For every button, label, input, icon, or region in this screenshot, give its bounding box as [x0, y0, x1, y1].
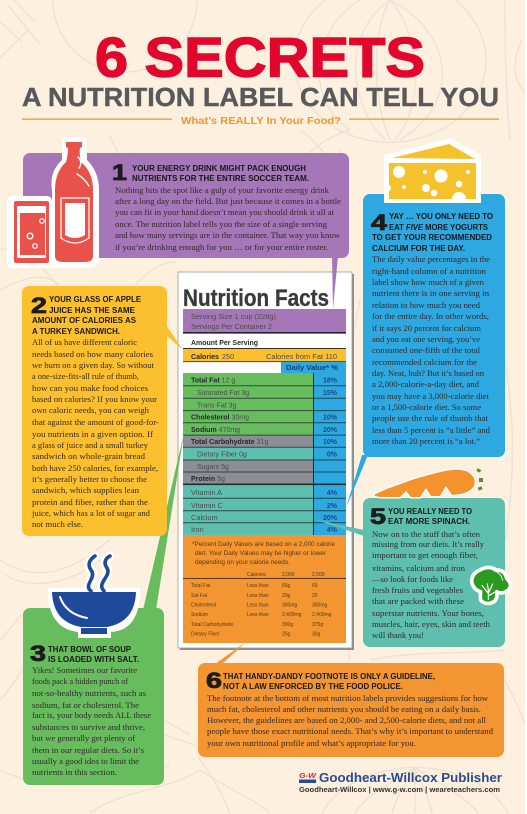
serving info band	[183, 309, 346, 334]
footnote section: Cholesterol	[191, 602, 216, 608]
panel 3: soup	[23, 608, 164, 785]
panel 2 heading: YOUR GLASS OF APPLE	[49, 295, 142, 304]
panel 3 body: nutrients in this section.	[32, 768, 117, 777]
footnote section: Sodium	[191, 612, 208, 618]
footnote section: 65g	[282, 583, 291, 589]
nutrient rows	[183, 373, 346, 535]
panel 3 body: sodium, fat or cholesterol. The	[32, 701, 139, 710]
panel 2 body: protein and fiber, rather than the	[32, 498, 148, 507]
icon: bottle and glass	[7, 137, 99, 268]
panel 3 body: but we generally get plenty of	[32, 734, 135, 743]
footnote section: 60	[312, 583, 318, 589]
panel 1: energy drink	[23, 153, 349, 258]
nutrient rows: Trans Fat 3g	[197, 402, 237, 410]
panel 4 body: less than 5 percent is “a little” and	[372, 426, 491, 435]
number 1: 1	[112, 160, 127, 185]
footnote section: 300mg	[312, 602, 328, 608]
panel 4 body: people use the rule of thumb that	[372, 414, 489, 423]
panel 5: spinach	[363, 498, 505, 647]
number 3: 3	[30, 641, 46, 666]
footnote section: 2,400mg	[282, 612, 302, 618]
panel 4 body: The daily value percentages in the	[372, 255, 490, 264]
nutrient rows: Total Carbohydrate 31g	[191, 439, 268, 446]
nutrient rows: Sugars 5g	[197, 464, 229, 471]
panel 3 heading: IS LOADED WITH SALT.	[48, 655, 139, 664]
title	[22, 26, 499, 127]
icon: soup bowl	[48, 556, 140, 638]
panel 5 body: fresh fruits and vegetables	[372, 586, 463, 595]
calories band	[183, 348, 346, 362]
publisher name: Goodheart-Willcox Publisher	[319, 770, 502, 785]
nutrient rows: 18%	[323, 378, 338, 384]
icon: broccoli	[472, 567, 510, 603]
panel 4 heading: CALCIUM FOR THE DAY.	[372, 244, 465, 253]
label title: Nutrition Facts	[183, 285, 329, 312]
daily value header	[281, 362, 346, 373]
panel 6 body: However, the guidelines are based on 2,000- and 2,500-calorie diets, and not all	[207, 716, 487, 725]
panel 4 heading: EAT FIVE MORE YOGURTS	[389, 223, 489, 232]
nutrient rows: Protein 5g	[191, 476, 225, 483]
footnote section: diet. Your Daily Values may be higher or lower	[195, 550, 326, 557]
panel 5 body	[371, 530, 491, 640]
panel 4 body: if it says 20 percent for calcium	[372, 324, 481, 333]
panel 4 heading	[372, 212, 493, 253]
panel 2 body: not much else.	[32, 520, 83, 529]
subheading: A NUTRITION LABEL CAN TELL YOU	[22, 82, 499, 112]
nutrient rows: 0%	[327, 452, 338, 458]
panel 1 body: after a long day on the field. But just because it comes in a bottle	[115, 197, 341, 206]
footnote section: *Percent Daily Values are based on a 2,000 calorie	[192, 541, 336, 548]
tagline: What’s REALLY In Your Food?	[181, 116, 341, 127]
number 2: 2	[31, 293, 47, 318]
nutrient rows: Total Fat 12 g	[191, 378, 235, 384]
panel 5 body: vitamins, calcium and iron	[372, 564, 466, 573]
panel 4: calcium	[363, 194, 505, 457]
panel 2 body: how can you make food choices	[32, 384, 148, 393]
nutrient rows: 4%	[327, 490, 338, 497]
nutrient rows: 20%	[323, 515, 338, 522]
nutrient rows: Vitamin C	[191, 501, 224, 510]
pointer: purple callout to label	[332, 256, 338, 309]
panel 2 body: a one-size-fits-all rule of thumb,	[32, 372, 139, 381]
panel 3 heading	[48, 645, 139, 664]
panel 5 body: missing from our diets. It’s really	[372, 540, 485, 549]
panel 3 body: not-so-healthy nutrients, such as	[32, 689, 146, 698]
pointer: green callout to label	[143, 433, 184, 610]
panel 1 body: you can fit in your hand doesn’t mean you should drink it all at	[115, 208, 335, 217]
publisher links: Goodheart-Willcox | www.g-w.com | weareteachers.com	[299, 787, 500, 794]
panel 6: footnote	[198, 663, 504, 757]
panel 6 body: people have those exact nutritional needs. That’s why it’s important to understand	[207, 727, 494, 736]
panel 2 heading: A TURKEY SANDWICH.	[32, 327, 120, 336]
footnote section	[183, 535, 346, 643]
footnote section: Calories:	[247, 572, 267, 578]
pointer: blue callout to label	[346, 455, 368, 508]
panel 2 body: it’s generally better to choose the	[32, 475, 147, 484]
panel 1 body: and how many servings are in the container. That way you know	[115, 231, 341, 240]
panel 6 body: your own nutritional profile and what’s appropriate for you.	[207, 739, 416, 748]
panel 5 body: Now on to the stuff that’s often	[372, 530, 481, 539]
panel 3 heading: THAT BOWL OF SOUP	[48, 645, 132, 654]
nutrition facts label	[178, 272, 354, 650]
serving info band: Serving Size 1 cup (228g)	[191, 314, 276, 321]
panel 4 body	[372, 255, 491, 446]
footnote section: depending on your calorie needs.	[195, 559, 290, 566]
heading: 6 secrets: 6 SECRETS	[95, 26, 425, 88]
panel 4 body: right-hand column of a nutrition	[372, 267, 487, 276]
panel 2 body: a glass of juice and a small turkey	[32, 441, 149, 450]
publisher logo	[299, 770, 502, 794]
panel 2: apple juice	[22, 286, 167, 536]
panel 1 heading: YOUR ENERGY DRINK MIGHT PACK ENOUGH	[132, 164, 306, 173]
footnote section: Less than	[247, 593, 269, 599]
panel 3 body: Yikes! Sometimes our favorite	[32, 666, 137, 675]
panel 1 body: if you’re drinking enough for you … or for your entire roster.	[115, 243, 328, 252]
footnote section: 25	[312, 593, 318, 599]
panel 5 heading: YOU REALLY NEED TO	[388, 507, 472, 516]
panel 2 body: needs based on how many calories	[32, 350, 153, 359]
panel 4 body: relation to how much you need	[372, 301, 481, 310]
panel 2 body: that against the amount of good-for-	[32, 418, 159, 427]
panel 3 body: substances to survive and thrive,	[32, 723, 145, 732]
panel 4 heading: YAY … YOU ONLY NEED TO	[389, 212, 493, 221]
panel 2 body: sandwich, which supplies lean	[32, 486, 140, 495]
nutrient rows: 15%	[323, 390, 338, 397]
panel 4 heading: TO GET YOUR RECOMMENDED	[372, 233, 492, 242]
nutrient rows: Vitamin A	[191, 488, 222, 497]
panel 1 body: Nothing hits the spot like a gulp of your favorite energy drink	[115, 186, 330, 195]
panel 2 body: juice, which has a lot of sugar and	[31, 509, 151, 518]
nutrient rows: Iron	[191, 525, 204, 534]
calories band: Calories from Fat 110	[266, 354, 337, 361]
panel 5 body: superstar nutrients. Your bones,	[372, 609, 484, 618]
panel 5 body: that are packed with these	[372, 597, 464, 606]
calories band: 250	[222, 354, 234, 361]
footnote section: 30g	[312, 632, 321, 638]
panel 2 body: you nutrients in a given option. If	[32, 430, 153, 439]
panel 5 heading: EAT MORE SPINACH.	[388, 517, 470, 526]
panel 5 body: muscles, hair, eyes, skin and teeth	[372, 620, 491, 629]
footnote section: Less than	[247, 602, 269, 608]
panel 3 body: foods pack a hidden punch of	[32, 677, 128, 686]
nutrient rows: Calcium	[191, 513, 218, 522]
footnote section: Total Carbohydrate	[191, 622, 233, 628]
nutrient rows: Dietary Fiber 0g	[197, 452, 247, 458]
footnote section: Less than	[247, 583, 269, 589]
panel 5 body: —so look for foods like	[371, 575, 453, 584]
nutrient rows: Saturated Fat 3g	[197, 390, 249, 397]
panel 4 body: consumed one-fifth of the total	[372, 346, 481, 355]
nutrient rows: Cholesterol 30mg	[191, 414, 249, 422]
panel 2 body: both have 250 calories, for example,	[32, 464, 158, 473]
panel 6 body: much fat, cholesterol and other nutrients you should be eating on a daily basis.	[207, 705, 481, 714]
panel 2 body: we burn on a given day. So without	[32, 361, 155, 370]
serving info band: Servings Per Container 2	[191, 324, 272, 331]
daily value header: Daily Value* %	[286, 365, 339, 372]
nutrient rows: 10%	[323, 414, 338, 422]
panel 2 body: All of us have different caloric	[32, 338, 137, 347]
panel 3 body: fact is, your body needs ALL these	[32, 711, 151, 720]
panel 2 body	[31, 338, 159, 529]
panel 4 body: a 2,000-calorie-a-day diet, and	[372, 380, 480, 389]
footnote section: 20g	[282, 593, 291, 599]
panel 5 body: will thank you!	[372, 631, 424, 640]
panel 3 body: usually a good idea to limit the	[32, 757, 139, 766]
footnote section: Dietary Fiber	[191, 632, 220, 638]
footnote section: Less than	[247, 612, 269, 618]
footnote section: 2,000	[282, 572, 295, 578]
panel 4 body: label show how much of a given	[372, 278, 485, 287]
panel 5 heading	[388, 507, 472, 526]
icon: G-W mark	[299, 771, 317, 783]
nutrient rows: Sodium 470mg	[191, 427, 240, 434]
number 5: 5	[370, 504, 386, 529]
icon: cheese	[384, 138, 481, 203]
footnote section: Sat Fat	[191, 593, 208, 599]
footnote section: 300g	[282, 622, 293, 628]
panel 1 body: once. The nutrition label tells you the size of a single serving	[115, 220, 328, 229]
nutrient rows: 2%	[327, 503, 338, 510]
footnote section: 375g	[312, 622, 323, 628]
panel 4 body: recommended calcium for the	[372, 358, 477, 367]
nutrient rows: 20%	[323, 427, 338, 434]
amount per serving: Amount Per Serving	[191, 340, 258, 347]
footnote section: 300mg	[282, 602, 298, 608]
panel 4 body: and you eat one serving, you’ve	[372, 335, 480, 344]
calories band: Calories	[191, 354, 219, 361]
footnote section: 2,500	[312, 572, 325, 578]
panel 2 heading: JUICE HAS THE SAME	[49, 306, 136, 315]
panel 6 heading	[223, 672, 435, 691]
panel 4 body: or a 1,500-calorie diet. So some	[372, 403, 481, 412]
panel 6 heading: NOT A LAW ENFORCED BY THE FOOD POLICE.	[223, 682, 403, 691]
panel 6 body: The footnote at the bottom of most nutrition labels provides suggestions for how	[207, 694, 489, 703]
pointer: yellow callout to label	[166, 325, 183, 350]
panel 3 body: them in our regular diets. So it’s	[32, 746, 144, 755]
nutrient rows: 4%	[327, 527, 338, 534]
panel 2 heading: AMOUNT OF CALORIES AS	[32, 316, 137, 325]
panel 5 body: important to get enough fiber,	[372, 551, 478, 560]
panel 2 body: own caloric needs, you can weigh	[32, 406, 150, 415]
panel 4 body: more than 20 percent is “a lot.”	[372, 437, 480, 446]
panel 4 body: you may have a 3,000-calorie diet	[372, 392, 490, 401]
panel 2 body: sandwich on whole-grain bread	[32, 452, 146, 461]
panel 1 body	[115, 186, 341, 252]
panel 4 body: day. Neat, huh? But it’s based on	[372, 369, 485, 378]
panel 2 body: based on calories? If you know your	[32, 395, 157, 404]
panel 6 heading: THAT HANDY-DANDY FOOTNOTE IS ONLY A GUIDELINE,	[223, 672, 435, 681]
panel 1 heading: NUTRIENTS FOR THE ENTIRE SOCCER TEAM.	[132, 174, 309, 183]
footnote section: 2,400mg	[312, 612, 332, 618]
number 4: 4	[371, 210, 388, 235]
panel 2 heading	[32, 295, 142, 336]
icon: carrot	[374, 468, 483, 497]
number 6: 6	[206, 668, 222, 693]
panel 6 body	[207, 694, 494, 748]
pointer: orange callout to label	[215, 642, 246, 664]
footnote section: 25g	[282, 632, 291, 638]
panel 1 heading	[132, 164, 309, 183]
icon: G-W mark: G-W	[299, 771, 317, 780]
nutrient rows: 10%	[323, 439, 338, 446]
panel 4 body: for the entire day. In other words,	[372, 312, 489, 321]
panel 3 body	[32, 666, 151, 777]
footnote section: Total Fat	[191, 583, 211, 589]
panel 4 body: nutrient there is in one serving in	[372, 289, 490, 298]
pointer: teal callout to label	[313, 519, 364, 536]
